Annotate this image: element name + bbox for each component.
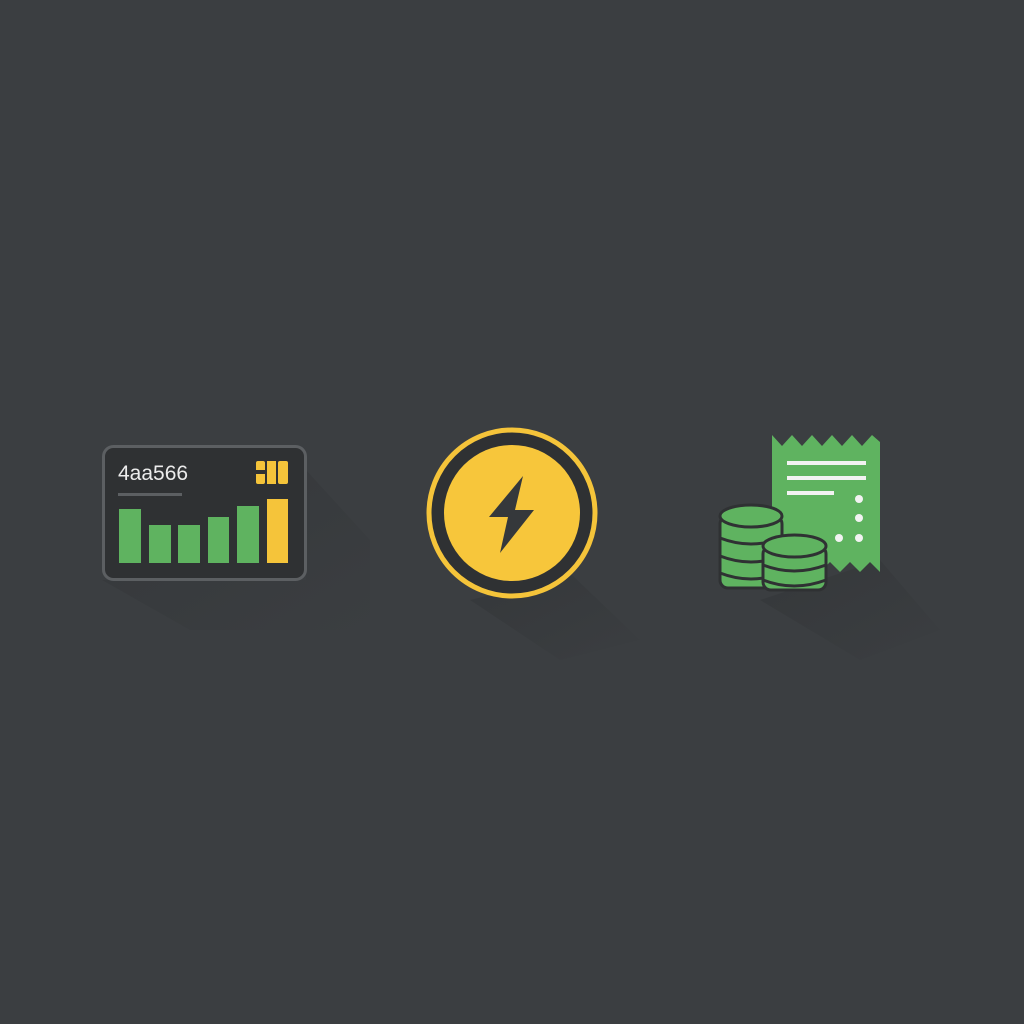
icon: chip xyxy=(256,461,288,484)
icon: dashboard card xyxy=(102,446,370,630)
icon: receipt and coins xyxy=(720,435,940,660)
bar chart xyxy=(119,499,288,563)
coin stacks xyxy=(720,505,826,590)
icon: lightning coin xyxy=(429,430,640,660)
card label text: 4aa566 xyxy=(118,462,188,485)
icon: lightning bolt xyxy=(489,476,534,553)
receipt xyxy=(772,435,880,572)
